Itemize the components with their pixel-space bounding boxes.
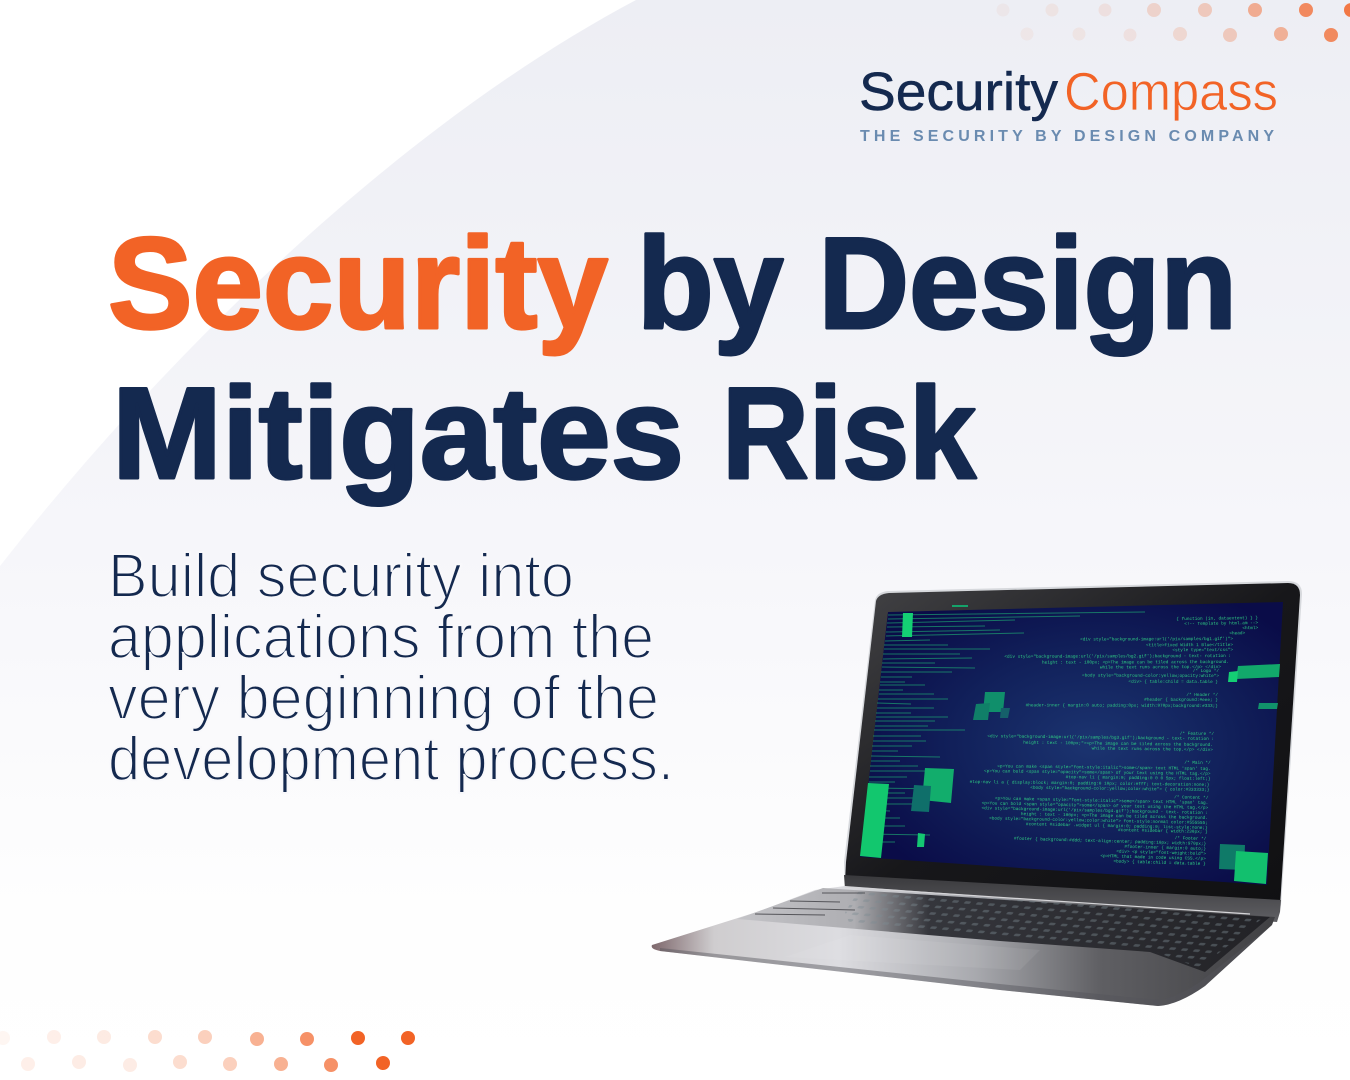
screen: code text: <body style="background-color:yellow;color:white"> font-style:normal color:#555555; [989, 816, 1208, 826]
laptop base deck [652, 886, 1275, 1006]
screen: code text: /* Content */ [1174, 795, 1209, 801]
decorative dots: bottom left [0, 1030, 415, 1072]
screen: code text: <div> { table:child = data.table } [1128, 680, 1218, 685]
screen: code text: <div style="background-image:url('/pix/samples/bg1.gif')"> [1080, 637, 1233, 643]
screen: left code lines [863, 612, 1145, 851]
screen: code text: #header { background:#eee; } [1144, 698, 1218, 703]
screen: code text: <div style="background-image:url('/pix/samples/bg3.gif');background - text- rotation : [987, 734, 1214, 742]
screen: code text: #top-nav li a { display:block; margin:0; padding:0 10px; color:#fff; text-decoration:none;} [970, 780, 1210, 788]
title [108, 210, 1237, 506]
screen: code text: height : text - 100px;"><p>The image can be tiled across the background. [1023, 741, 1213, 748]
laptop screen [860, 602, 1283, 885]
screen: code text: /* Main */ [1184, 761, 1211, 766]
screen: code text: { function (in, dataextent) } } [1176, 616, 1258, 622]
screen: code text: <p>You can bold <span style="opacity">some</span> of your text using the HTML tag.</p> [984, 769, 1211, 777]
screen: code text: <body style="background-color:yellow;opacity:white"> [1082, 674, 1219, 679]
screen: code text: #footer-inner { margin:0 auto;} [1124, 845, 1206, 852]
screen: code text: #content #sidebar .widget ul { margin:0; padding:0; list-style:none;} [1026, 822, 1208, 831]
screen: code text: <div> <p style="font-weight:bold"> [1116, 849, 1206, 857]
subtitle text block: applications from the [108, 603, 654, 672]
screen: code text: /* Feature */ [1180, 732, 1214, 737]
laptop illustration [652, 581, 1302, 1006]
subtitle text block: very beginning of the [108, 664, 659, 733]
logo tagline: THE SECURITY BY DESIGN COMPANY [860, 128, 1274, 145]
laptop trackpad highlight [785, 935, 1040, 970]
title: Risk [722, 360, 977, 506]
screen: code text: #top-nav li { margin:0; padding:0 0 0 5px; float:left;} [1066, 775, 1211, 782]
screen: green blocks [860, 605, 1280, 884]
screen: code text: <p>You can make <span style="font-style:italic">some</span> text HTML 'span' tag. [995, 797, 1208, 806]
title: Mitigates [112, 360, 684, 506]
screen: code text: height : text - 100px; <p>The image can be tiled across the background. [1042, 660, 1229, 666]
screen: code text: /* Header */ [1186, 693, 1218, 698]
title: by Design [637, 210, 1237, 356]
screen: code text: #content #sidebar { width:230px; } [1118, 828, 1208, 835]
screen: code text: <p>HTML that made in code using CSS.</p> [1100, 854, 1206, 862]
screen: code text: /* Footer */ [1175, 836, 1207, 842]
screen: code text: <title>Fixed Width 1 Blue</title> [1146, 643, 1233, 648]
screen: code text: #header-inner { margin:0 auto; padding:0px; width:970px;background:#333;} [1026, 703, 1218, 709]
screen: code text: <head> [1229, 631, 1246, 636]
subtitle text block: Build security into [108, 542, 574, 611]
screen: code text: <html> [1242, 626, 1259, 631]
screen: code text: <body> { table:child = data.table } [1113, 859, 1206, 867]
screen: code text: while the text runs across the top.</p> </div> [1092, 746, 1213, 753]
laptop keyboard [737, 887, 1270, 972]
screen: code text: height : text - 100px; <p>The image can be tiled across the background. [1021, 812, 1208, 821]
screen: code text: <p>You can bold <span style="opacity">some</span> of your text using the HTML tag.</p> [982, 801, 1209, 811]
screen: code text: #footer { background:#ddd; text-align:center; padding:10px; width:970px;} [1014, 837, 1207, 847]
screen: code text: <!-- Template by html.am --> [1184, 621, 1258, 627]
laptop hinge [844, 875, 1281, 922]
logo wordmark: Compass [1064, 62, 1278, 122]
logo wordmark: Security [859, 62, 1058, 122]
subtitle text block: development process. [108, 725, 674, 794]
decorative dots: top right [996, 3, 1350, 42]
title: Security [108, 210, 608, 356]
screen: code text: <p>You can make <span style="font-style:italic">some</span> text HTML 'span' tag. [997, 764, 1211, 772]
base front shadow edge [660, 925, 1272, 1006]
screen: code text: <div style="background-image:url('/pix/samples/bg4.gif');background - text- rotation : [981, 806, 1208, 816]
screen: code text: <div style="background-image:url('/pix/samples/bg2.gif');background - text- rotation : [1004, 654, 1231, 660]
screen: code text: while the text runs across the top.</p> </div> [1100, 665, 1221, 670]
laptop lid [844, 581, 1302, 915]
screen: code text: <body style="background-color:yellow;color:white"> { color:#333333;} [1030, 786, 1210, 793]
logo: Security Compass [859, 62, 1278, 145]
screen: code text: /* Logo */ [1193, 669, 1219, 674]
logo wordmark [859, 62, 1278, 122]
screen: code text [970, 616, 1259, 867]
screen: code text: <style type="text/css"> [1172, 648, 1233, 653]
subtitle text block [108, 542, 674, 794]
